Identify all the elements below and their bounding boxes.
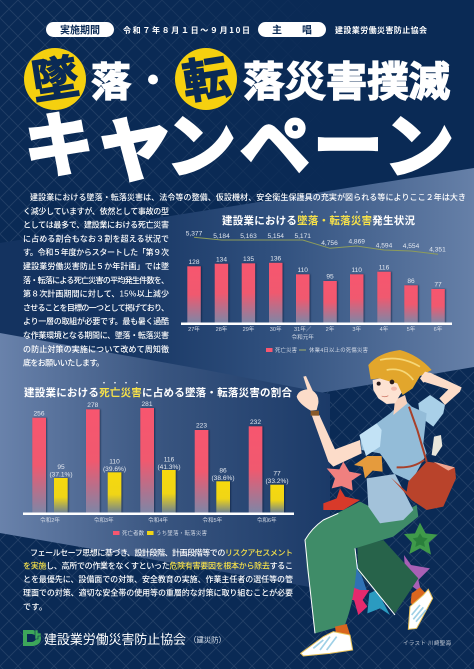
chart 2 axis labels: 令和5年 bbox=[202, 516, 223, 524]
organisation logo and name: 建設業労働災害防止協会 bbox=[44, 632, 186, 647]
chart 1 injury values: 4,554 bbox=[403, 243, 420, 250]
chart 2 values: (37.1%) bbox=[49, 471, 73, 478]
chart 2 values: 95 bbox=[57, 464, 65, 471]
intro paragraph: 第８次計画期間に対して、15％以上減少 bbox=[23, 289, 169, 299]
chart 1 legend: 休業4日以上の死傷災害 bbox=[309, 346, 369, 354]
closing paragraph: です。 bbox=[23, 603, 47, 612]
chart 2 values: 232 bbox=[250, 419, 261, 426]
chart 1 injury values: 5,377 bbox=[186, 230, 203, 238]
intro paragraph: 底をお願いいたします。 bbox=[23, 358, 104, 368]
chart 2 values: (41.3%) bbox=[157, 464, 181, 471]
chart 1 injury values: 4,594 bbox=[376, 242, 393, 250]
closing paragraph: を実施し、高所での作業をなくすといった危険有害要因を根本から除去するこ bbox=[23, 561, 293, 571]
chart 2 values: (33.2%) bbox=[265, 478, 289, 485]
hand behind head bbox=[420, 372, 432, 383]
chart 2 values: 116 bbox=[164, 456, 175, 464]
chart 1 death values bbox=[188, 256, 442, 289]
chart 1 death values: 77 bbox=[434, 282, 442, 289]
chart 2 values: 223 bbox=[196, 422, 207, 430]
chart 1 legend bbox=[266, 346, 369, 354]
raised arm bbox=[422, 373, 462, 405]
chart 1 death values: 116 bbox=[379, 264, 390, 271]
chart 1 axis labels: 30年 bbox=[270, 325, 282, 333]
chart 1 baseline bbox=[181, 322, 452, 325]
bag and straps bbox=[391, 407, 456, 510]
chart 2 values: (38.6%) bbox=[211, 475, 235, 482]
chart 2 axis labels: 令和2年 bbox=[40, 516, 60, 524]
orange star bbox=[354, 456, 383, 478]
chart 1 axis labels: 29年 bbox=[243, 325, 255, 333]
chart 1 injury values: 5,171 bbox=[294, 233, 311, 240]
chart 1: annual fall accidents bbox=[181, 211, 452, 354]
chart 1 death values: 110 bbox=[297, 267, 308, 274]
chart 2 heading: 建設業における死亡災害に占める墜落・転落災害の割合 bbox=[24, 385, 292, 400]
intro paragraph bbox=[23, 192, 466, 368]
chart 2 axis labels bbox=[40, 516, 277, 524]
chart 1 axis labels: 4年 bbox=[380, 325, 389, 333]
chart 2 legend: うち墜落・転落災害 bbox=[156, 529, 208, 537]
campaign period and sponsor row: 唱 bbox=[302, 21, 312, 36]
chart 1 axis labels: 5年 bbox=[407, 325, 416, 333]
intro paragraph: に占める割合もなお３割を超える状況で bbox=[23, 233, 169, 243]
back shoe bbox=[408, 587, 433, 629]
title line: campaign: ン bbox=[384, 91, 454, 192]
chart 1 axis labels: 6年 bbox=[434, 325, 443, 333]
chart 1 injury values: 4,869 bbox=[348, 238, 365, 246]
woman lower body bbox=[301, 502, 438, 656]
title line: fall and tumble accident eradication: 転 bbox=[177, 38, 234, 113]
title line: campaign: キ bbox=[24, 90, 94, 191]
chart 1 legend: 死亡災害 bbox=[275, 346, 298, 354]
intro paragraph: す。令和５年度からスタートした「第９次 bbox=[23, 247, 169, 257]
intro paragraph: 建設業における墜落・転落災害は、法令等の整備、仮設機材、安全衛生保護具の充実が図られる等によりここ２年は大き bbox=[30, 192, 466, 202]
intro paragraph: 落・転落による死亡災害の平均発生件数を、 bbox=[23, 275, 169, 285]
stars at waist bbox=[323, 462, 362, 510]
chart 1 death values: 95 bbox=[326, 274, 334, 281]
campaign period and sponsor row bbox=[46, 21, 427, 37]
campaign period and sponsor row: 主 bbox=[272, 21, 282, 36]
illustration: woman running with stars bbox=[297, 350, 462, 656]
chart 2 deaths bars bbox=[32, 408, 262, 513]
title line: campaign: ャ bbox=[92, 76, 176, 197]
chart 1 axis labels: 28年 bbox=[216, 325, 228, 333]
title line: campaign: ン bbox=[166, 91, 236, 192]
chart 1 injury values: 5,163 bbox=[240, 233, 257, 240]
chart 1 axis labels: 31年／ bbox=[294, 325, 312, 333]
back leg bbox=[357, 540, 418, 613]
closing paragraph: とを最優先に、設備面での対策、安全教育の実施、作業主任者の選任等の管 bbox=[23, 574, 293, 584]
chart 2 axis labels: 令和4年 bbox=[148, 516, 168, 524]
chart 2 axis labels: 令和6年 bbox=[257, 516, 277, 524]
chart 1 injury values: 4,756 bbox=[321, 240, 338, 247]
title line: fall and tumble accident eradication bbox=[24, 38, 450, 113]
illustrator credit: イラスト 川崎聖海 bbox=[403, 639, 451, 647]
chart 1 axis labels: 2年 bbox=[326, 325, 335, 333]
title line: fall and tumble accident eradication: 落 bbox=[91, 50, 131, 108]
campaign period and sponsor row: 実施期間 bbox=[60, 21, 100, 36]
shirt bbox=[359, 395, 445, 482]
front leg bbox=[305, 502, 418, 633]
shirt tail bbox=[367, 474, 413, 523]
chart 1 death values: 135 bbox=[243, 256, 254, 263]
intro paragraph: な作業環境となる期間に、墜落・転落災害 bbox=[23, 330, 169, 340]
chart 1 injuries line bbox=[194, 237, 438, 254]
lifted arm bbox=[297, 376, 362, 467]
chart 1 injury values: 4,351 bbox=[429, 246, 446, 254]
intro paragraph: させることを目標の一つとして掲げており、 bbox=[23, 302, 169, 312]
intro paragraph: く減少していますが、依然として事故の型 bbox=[23, 206, 169, 216]
chart 1 deaths bars bbox=[187, 263, 445, 323]
head bbox=[368, 350, 432, 415]
chart 1 death values: 134 bbox=[216, 256, 227, 263]
chart 1 axis labels: 27年 bbox=[188, 325, 200, 333]
title line: campaign bbox=[24, 76, 454, 197]
closing paragraph: 理面での対策、適切な安全帯の使用等の重層的な対策に取り組むことが必要 bbox=[23, 588, 293, 598]
organisation logo and name bbox=[23, 630, 226, 647]
chart 1 death values: 136 bbox=[270, 256, 282, 262]
campaign period and sponsor row: 建設業労働災害防止協会 bbox=[335, 25, 427, 36]
closing paragraph bbox=[23, 547, 293, 612]
chart 2 values bbox=[33, 401, 289, 485]
closing paragraph: フェールセーフ思想に基づき、設計段階、計画段階等でのリスクアセスメント bbox=[30, 547, 293, 557]
chart 1 injury values bbox=[186, 230, 446, 254]
campaign period and sponsor row: 令和７年８月１日～９月10日 bbox=[123, 25, 250, 36]
chart 1 injury values: 5,154 bbox=[267, 233, 284, 240]
icon: organisation mark bbox=[23, 630, 41, 646]
title line: campaign: ペ bbox=[240, 91, 310, 192]
woman upper body bbox=[297, 350, 462, 523]
title line: fall and tumble accident eradication: 墜 bbox=[26, 38, 83, 113]
chart 1 axis labels: 令和元年 bbox=[292, 333, 314, 341]
chart 2 values: 278 bbox=[87, 402, 99, 409]
chart 2 values: 86 bbox=[219, 468, 227, 474]
title line: fall and tumble accident eradication: 落災害撲滅 bbox=[243, 48, 450, 108]
chart 1 axis labels: 3年 bbox=[352, 325, 361, 333]
front shoe bbox=[301, 624, 353, 656]
chart 2 baseline bbox=[23, 512, 294, 515]
intro paragraph: としては最多で、建設業における死亡災害 bbox=[23, 220, 169, 230]
chart 2 fall bars bbox=[54, 470, 284, 513]
chart 2: share of deaths bbox=[23, 382, 294, 537]
chart 2 legend: 死亡者数 bbox=[122, 529, 145, 537]
chart 1 axis labels bbox=[188, 325, 443, 341]
chart 1 death values: 110 bbox=[351, 267, 362, 274]
trouser highlights bbox=[305, 513, 395, 633]
chart 2 axis labels: 令和3年 bbox=[94, 516, 114, 524]
chart 2 legend bbox=[113, 529, 208, 537]
chart 1 death values: 86 bbox=[407, 278, 415, 285]
organisation logo and name: （建災防） bbox=[189, 634, 226, 644]
chart 2 values: (39.6%) bbox=[103, 466, 126, 473]
chart 1 injury values: 5,184 bbox=[213, 233, 230, 240]
intro paragraph: 建設業労働災害防止５か年計画」では墜 bbox=[23, 261, 169, 271]
chart 2 values: 110 bbox=[109, 458, 120, 466]
back leg stars bbox=[342, 523, 438, 615]
chart 2 values: 256 bbox=[33, 410, 45, 418]
intro paragraph: より一層の取組が必要です。最も暑く過酷 bbox=[23, 316, 169, 326]
chart 2 values: 281 bbox=[141, 401, 153, 408]
intro paragraph: の防止対策の実施について改めて周知徹 bbox=[23, 344, 169, 354]
chart 1 death values: 128 bbox=[188, 259, 200, 266]
chart 1 heading: 建設業における墜落・転落災害発生状況 bbox=[222, 213, 416, 228]
chart 2 values: 77 bbox=[273, 470, 281, 478]
title line: campaign: ー bbox=[313, 91, 383, 192]
